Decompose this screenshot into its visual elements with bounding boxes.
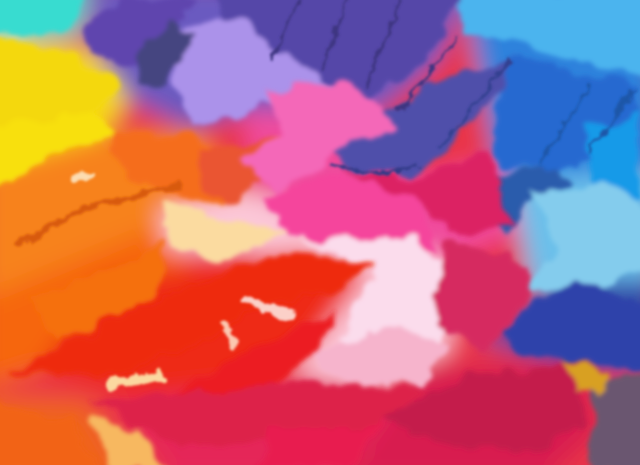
fine highlights and ridges [18, 0, 635, 385]
pink and white central strokes [240, 80, 535, 385]
yellow and orange strokes [0, 0, 290, 465]
purple and blue strokes [80, 0, 640, 370]
red splatter strokes [10, 250, 640, 465]
